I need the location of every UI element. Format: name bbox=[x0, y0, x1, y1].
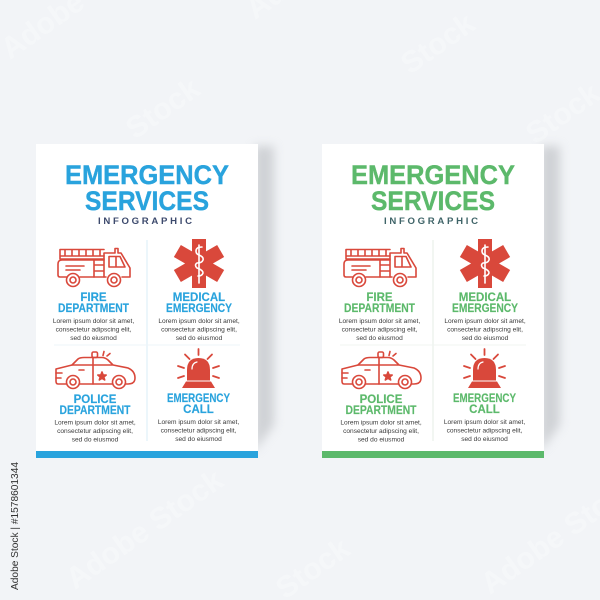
text: medical emergency body: consectetur adipscing elit, bbox=[161, 326, 237, 334]
watermarks: Stock bbox=[120, 72, 206, 146]
text: emergency call body: consectetur adipscing elit, bbox=[161, 428, 237, 434]
label: police department: POLICE bbox=[360, 394, 403, 406]
icon: siren bbox=[178, 349, 219, 388]
label: emergency call: EMERGENCY bbox=[167, 393, 230, 405]
footer bar bbox=[36, 451, 258, 458]
label: fire department bbox=[58, 292, 129, 315]
label: police department bbox=[60, 394, 130, 417]
label: emergency call: CALL bbox=[469, 404, 500, 416]
text: police department body: consectetur adipscing elit, bbox=[343, 428, 419, 435]
label: emergency call bbox=[167, 393, 230, 416]
heading: EMERGENCY bbox=[65, 160, 229, 190]
text: medical emergency body: Lorem ipsum dolor sit amet, bbox=[158, 318, 240, 325]
label: medical emergency: EMERGENCY bbox=[166, 303, 232, 315]
text: emergency call body: consectetur adipscing elit, bbox=[447, 428, 523, 434]
icon: star of life bbox=[174, 239, 224, 288]
text: medical emergency body: consectetur adipscing elit, bbox=[447, 326, 523, 334]
icon: siren bbox=[464, 349, 505, 388]
heading bbox=[65, 160, 229, 216]
text: emergency call body bbox=[444, 419, 525, 443]
text: police department body bbox=[340, 420, 422, 444]
heading: SERVICES bbox=[371, 186, 495, 216]
label: police department: POLICE bbox=[74, 394, 117, 406]
text: medical emergency body: Lorem ipsum dolor sit amet, bbox=[444, 318, 526, 325]
subheading: INFOGRAPHIC bbox=[98, 216, 192, 227]
label: medical emergency: MEDICAL bbox=[173, 292, 225, 304]
label: emergency call: EMERGENCY bbox=[453, 393, 516, 405]
text: police department body: sed do eiusmod bbox=[72, 436, 119, 444]
label: fire department: DEPARTMENT bbox=[344, 303, 415, 315]
label: police department: DEPARTMENT bbox=[346, 405, 416, 417]
text: emergency call body: Lorem ipsum dolor sit amet, bbox=[158, 419, 239, 426]
text: police department body: sed do eiusmod bbox=[358, 436, 405, 444]
poster card bbox=[36, 144, 258, 458]
poster shadow bbox=[254, 146, 274, 452]
poster card bbox=[322, 144, 544, 458]
icon: star of life bbox=[460, 239, 510, 288]
heading: SERVICES bbox=[85, 186, 209, 216]
text: fire department body: sed do eiusmod bbox=[70, 335, 117, 342]
text: police department body: Lorem ipsum dolor sit amet, bbox=[54, 420, 136, 426]
label: police department: DEPARTMENT bbox=[60, 405, 130, 417]
label: medical emergency: MEDICAL bbox=[459, 292, 511, 304]
label: emergency call bbox=[453, 393, 516, 416]
text: police department body: Lorem ipsum dolor sit amet, bbox=[340, 420, 422, 426]
text: fire department body: Lorem ipsum dolor sit amet, bbox=[339, 318, 420, 325]
text: fire department body: Lorem ipsum dolor sit amet, bbox=[53, 318, 134, 325]
label: fire department: DEPARTMENT bbox=[58, 303, 129, 315]
footer bar bbox=[322, 451, 544, 458]
heading bbox=[351, 160, 515, 216]
label: fire department: FIRE bbox=[366, 292, 393, 304]
text: fire department body: sed do eiusmod bbox=[356, 335, 403, 342]
text: emergency call body bbox=[158, 419, 239, 443]
text: fire department body bbox=[53, 318, 134, 342]
label: fire department bbox=[344, 292, 415, 315]
icon: fire truck bbox=[58, 248, 130, 286]
label: police department bbox=[346, 394, 416, 417]
poster shadow bbox=[540, 146, 560, 452]
text: police department body: consectetur adipscing elit, bbox=[57, 428, 133, 435]
label: medical emergency bbox=[166, 292, 232, 315]
text: fire department body: consectetur adipscing elit, bbox=[342, 326, 418, 334]
label: fire department: FIRE bbox=[80, 292, 107, 304]
text: emergency call body: sed do eiusmod bbox=[175, 436, 222, 443]
text: fire department body: consectetur adipscing elit, bbox=[56, 326, 132, 334]
watermarks: Adobe Stock bbox=[60, 463, 229, 596]
text: medical emergency body: sed do eiusmod bbox=[176, 335, 223, 342]
watermarks: Stock bbox=[395, 7, 481, 81]
panel: blue poster bbox=[36, 144, 274, 458]
subheading: INFOGRAPHIC bbox=[384, 216, 478, 227]
text: medical emergency body bbox=[158, 318, 240, 342]
icon: police car bbox=[342, 352, 421, 388]
text: fire department body bbox=[339, 318, 420, 342]
panel: green poster bbox=[322, 144, 560, 458]
label: medical emergency: EMERGENCY bbox=[452, 303, 518, 315]
icon: police car bbox=[56, 352, 135, 388]
text: medical emergency body: sed do eiusmod bbox=[462, 335, 509, 342]
icon: fire truck bbox=[344, 248, 416, 286]
text: emergency call body: sed do eiusmod bbox=[461, 436, 508, 443]
text: medical emergency body bbox=[444, 318, 526, 342]
text: police department body bbox=[54, 420, 136, 444]
stock id label: Adobe Stock | #1578601344 bbox=[9, 462, 21, 590]
heading: EMERGENCY bbox=[351, 160, 515, 190]
label: emergency call: CALL bbox=[183, 404, 214, 416]
label: medical emergency bbox=[452, 292, 518, 315]
text: emergency call body: Lorem ipsum dolor sit amet, bbox=[444, 419, 525, 426]
